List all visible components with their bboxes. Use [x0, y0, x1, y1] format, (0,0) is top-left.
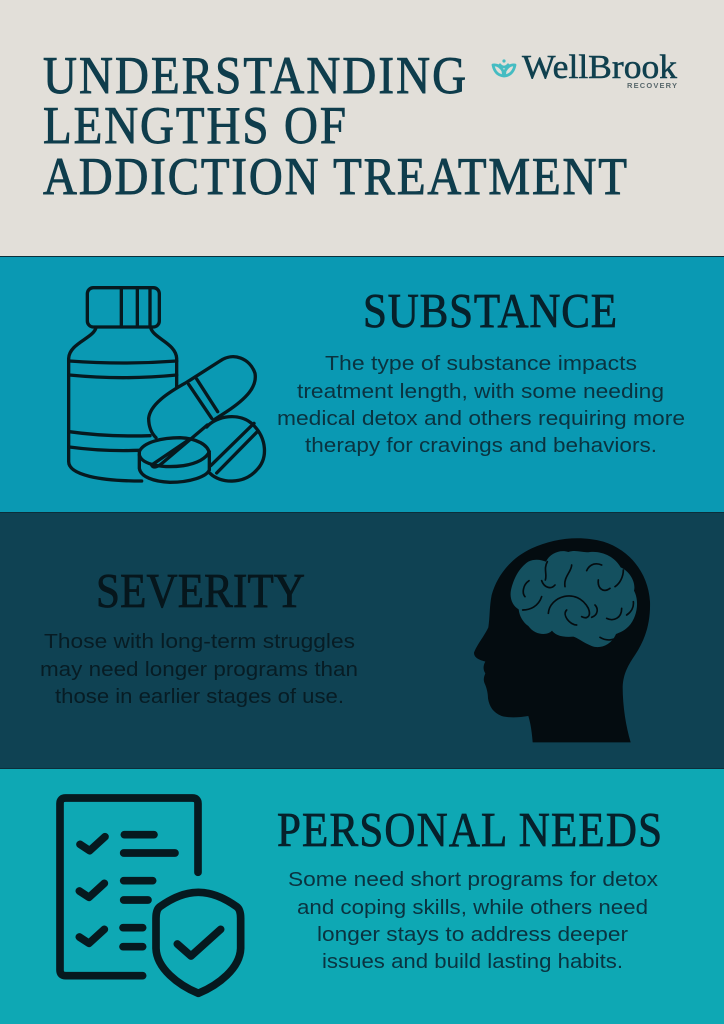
panel: header [0, 0, 724, 256]
logo tagline: RECOVERY [627, 81, 677, 90]
icon: pill bottle and pills [69, 288, 264, 482]
title [43, 45, 627, 206]
logo: WellBrook Recovery [493, 49, 677, 90]
text block: substance: The type of substance impacts [325, 352, 637, 375]
text block: severity [40, 630, 358, 708]
text block: severity: may need longer programs than [40, 658, 358, 681]
text block: substance [277, 352, 685, 457]
text block: substance: therapy for cravings and behaviors. [305, 434, 657, 457]
title: UNDERSTANDING [43, 45, 466, 105]
text block: personal needs [288, 868, 659, 973]
text block: substance: medical detox and others requiring more [277, 407, 685, 430]
text block: personal needs: longer stays to address deeper [317, 923, 628, 946]
icon: checklist and shield [60, 798, 241, 993]
panel: substance [0, 257, 724, 512]
text block: personal needs: Some need short programs for detox [288, 868, 659, 891]
text block: severity: Those with long-term struggles [44, 630, 355, 653]
title: LENGTHS OF [43, 95, 346, 155]
panel: severity [0, 513, 724, 768]
text block: personal needs: and coping skills, while others need [297, 896, 648, 919]
heading: personal needs: PERSONAL NEEDS [277, 803, 662, 857]
panel: personal needs [0, 769, 724, 1024]
icon: head with brain [474, 538, 650, 742]
head silhouette [474, 538, 650, 742]
heading: severity: SEVERITY [96, 564, 305, 618]
icon: lotus [493, 59, 515, 76]
brain folds [523, 562, 633, 640]
text block: severity: those in earlier stages of use. [55, 685, 344, 708]
logo wordmark: WellBrook [522, 49, 677, 86]
brain [511, 551, 637, 647]
heading: substance: SUBSTANCE [363, 284, 617, 338]
title: ADDICTION TREATMENT [43, 146, 627, 206]
text block: personal needs: issues and build lasting habits. [322, 950, 623, 973]
text block: substance: treatment length, with some needing [297, 380, 664, 403]
